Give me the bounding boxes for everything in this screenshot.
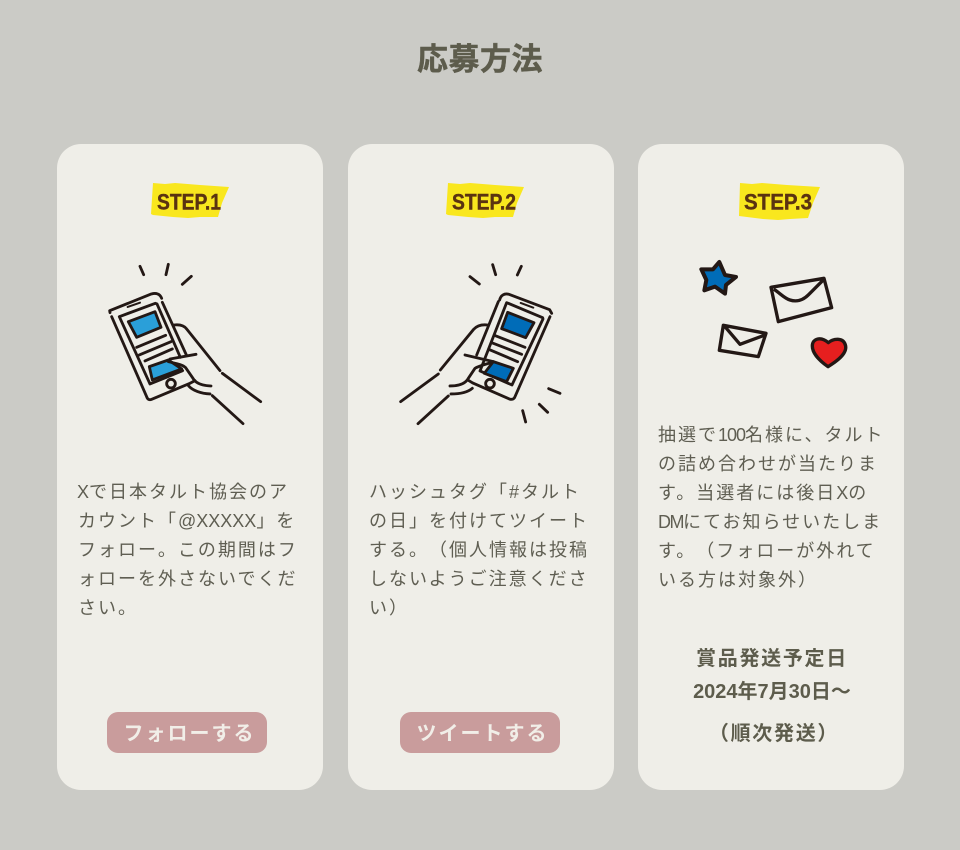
text: す。（フォローが外れて	[658, 541, 876, 561]
text: の詰め合わせが当たりま	[658, 454, 878, 474]
text block: step 2	[369, 482, 589, 618]
badge: step 3: STEP.3	[744, 190, 812, 214]
text: カウント「@XXXXX」を	[78, 511, 296, 531]
text: ハッシュタグ「#タルト	[369, 482, 581, 502]
badge: step 1	[151, 183, 229, 218]
badge: step 1: STEP.1	[157, 190, 221, 214]
text: フォロー。この期間はフ	[78, 540, 298, 560]
text: の日」を付けてツイート	[369, 511, 589, 531]
badge: step 3	[739, 183, 820, 220]
icon: stars, envelopes and heart	[701, 262, 846, 367]
icon: blue star	[701, 262, 736, 294]
text: い）	[369, 598, 409, 618]
text block: step 1	[77, 482, 298, 618]
text: ォローを外さないでくだ	[78, 569, 297, 589]
panel: step 3	[638, 144, 904, 790]
shipping date	[693, 648, 851, 745]
title: 応募方法	[417, 42, 543, 77]
text: する。（個人情報は投稿	[369, 540, 589, 560]
button: tweet	[400, 712, 560, 753]
text: 2024年7月30日～	[693, 681, 851, 703]
badge: step 2: STEP.2	[452, 190, 516, 214]
panel: step 2	[348, 144, 614, 790]
text: （順次発送）	[709, 723, 839, 745]
text: しないようご注意くださ	[369, 569, 589, 589]
button: follow: フォローする	[124, 723, 256, 745]
text: DMにてお知らせいたしま	[658, 512, 882, 532]
icon: phone in left hand	[401, 265, 560, 424]
text: Xで日本タルト協会のア	[77, 482, 289, 502]
text: いる方は対象外）	[658, 570, 818, 590]
text block: step 3	[658, 425, 885, 590]
icon: red heart	[812, 339, 846, 367]
icon: phone in right hand	[110, 264, 261, 424]
icon: small envelope	[719, 325, 766, 357]
button: tweet: ツイートする	[416, 723, 548, 745]
text: 賞品発送予定日	[696, 648, 848, 670]
panel: step 1	[57, 144, 323, 790]
text: 抽選で100名様に、タルト	[658, 425, 885, 445]
badge: step 2	[446, 183, 524, 218]
icon: large envelope	[771, 278, 832, 322]
text: さい。	[78, 598, 138, 618]
text: す。当選者には後日Xの	[658, 483, 868, 503]
button: follow	[107, 712, 267, 753]
